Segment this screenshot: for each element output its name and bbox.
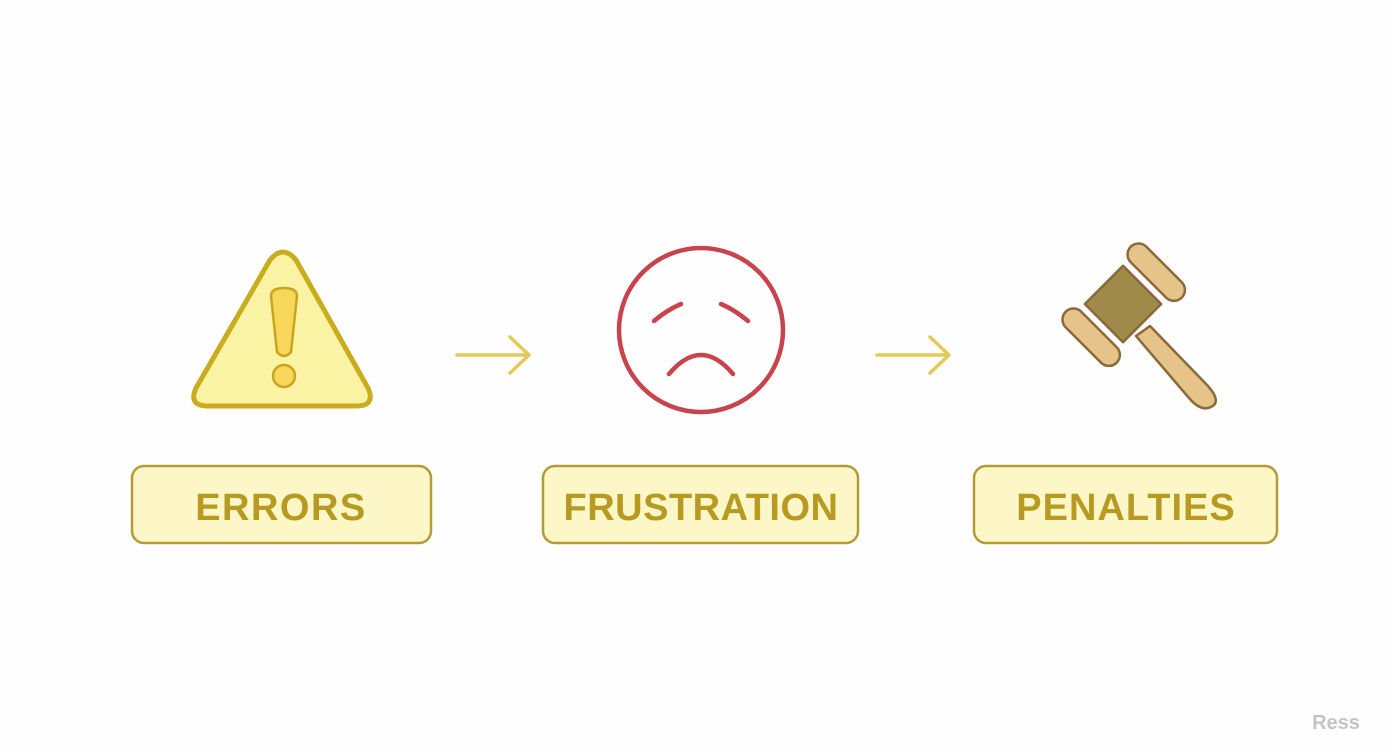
label: frustration — [543, 466, 858, 543]
label: frustration: FRUSTRATION — [564, 487, 838, 529]
arrow 2 — [877, 337, 949, 373]
label: errors — [132, 466, 431, 543]
icon: warning triangle — [194, 252, 370, 406]
watermark: Ress — [1312, 712, 1360, 734]
label: penalties — [974, 466, 1277, 543]
icon: gavel — [1058, 239, 1216, 408]
label: penalties: PENALTIES — [1016, 487, 1236, 529]
arrow 1 — [457, 337, 529, 373]
icon: sad face — [619, 248, 783, 412]
label: errors: ERRORS — [195, 487, 367, 529]
